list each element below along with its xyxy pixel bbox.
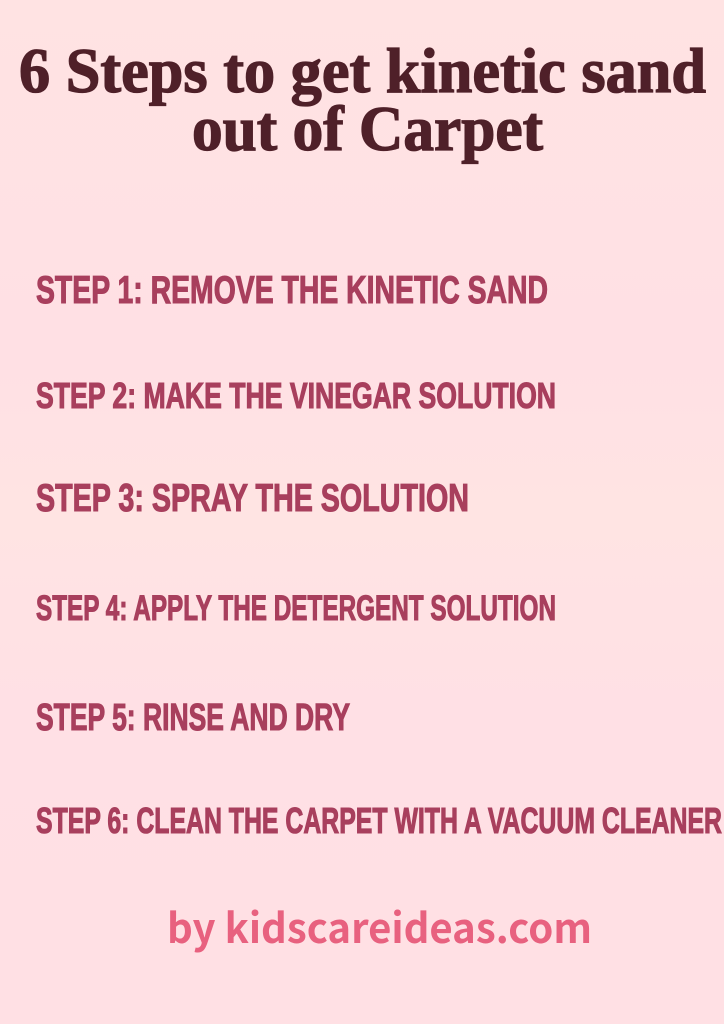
title: out of Carpet <box>192 93 544 164</box>
step 3: STEP 3: SPRAY THE SOLUTION <box>36 477 469 520</box>
title: 6 Steps to get kinetic sand <box>19 35 706 106</box>
step 1: STEP 1: REMOVE THE KINETIC SAND <box>36 269 548 312</box>
title <box>19 35 706 164</box>
step 2: STEP 2: MAKE THE VINEGAR SOLUTION <box>36 375 556 416</box>
step 5: STEP 5: RINSE AND DRY <box>36 697 350 739</box>
attribution: by kidscareideas.com <box>167 895 592 955</box>
